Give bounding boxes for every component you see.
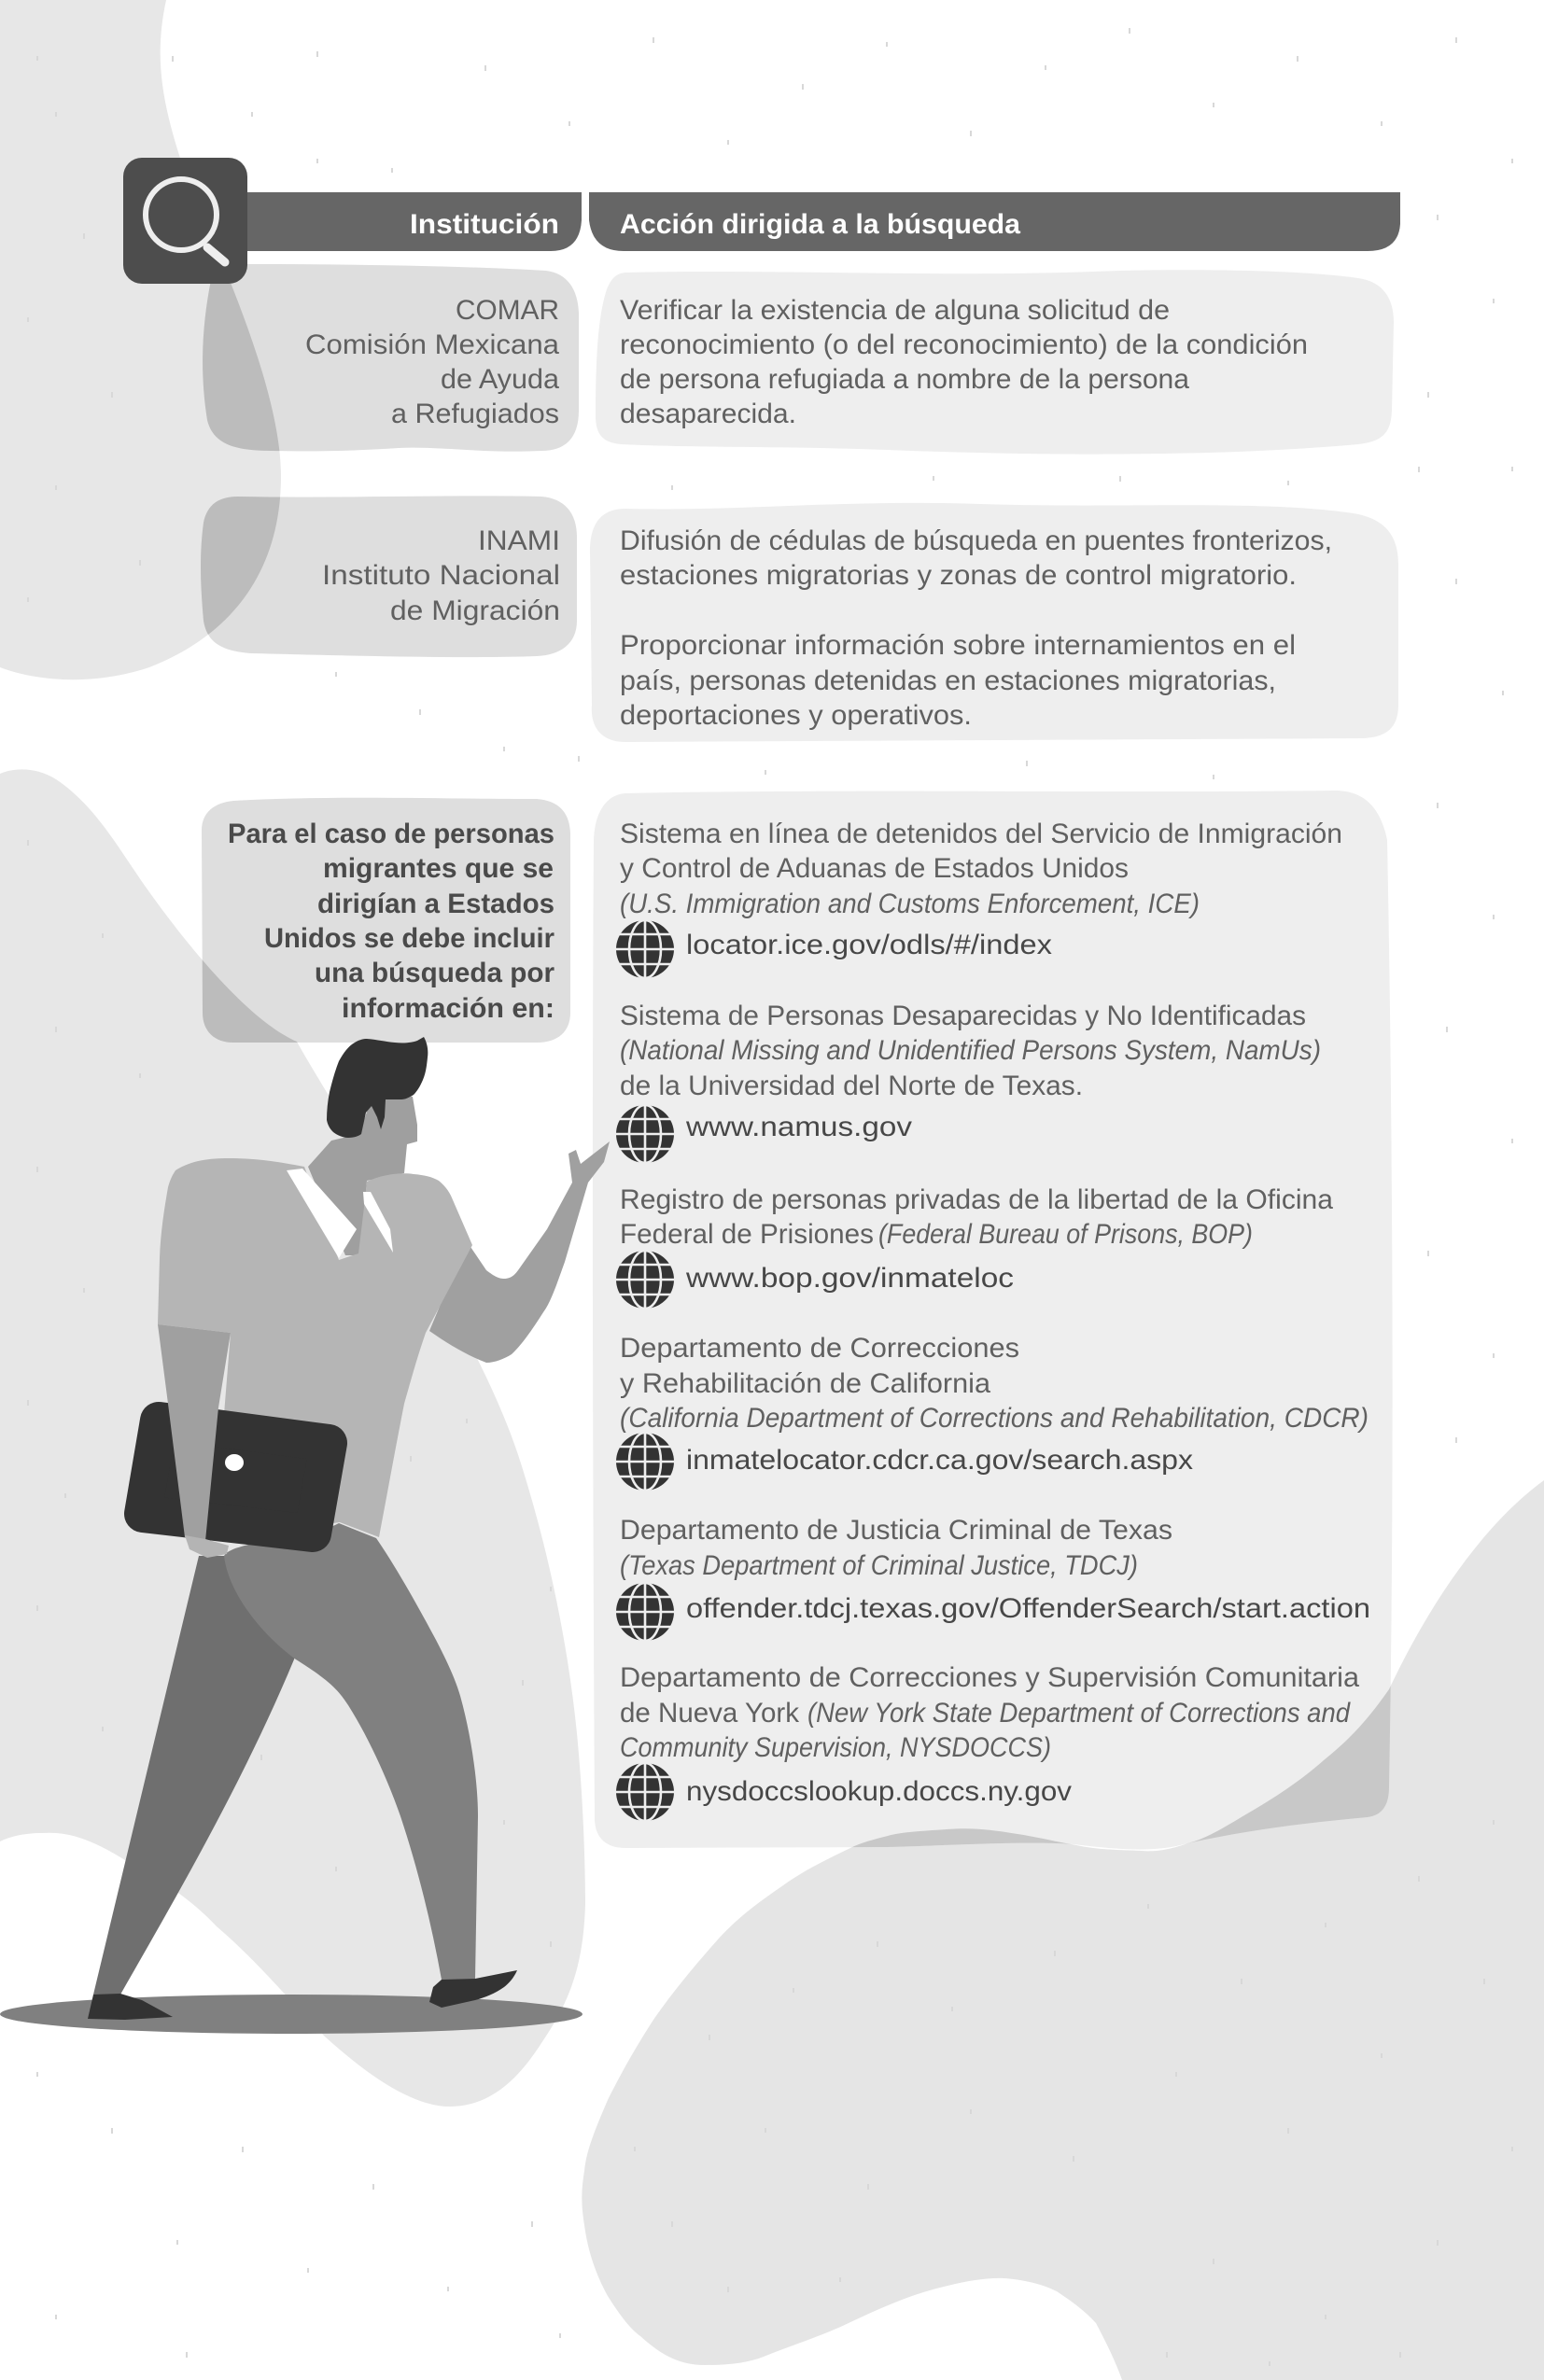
text: INAMI action: Difusión de cédulas de búsqueda en puentes fronterizos,	[620, 525, 1332, 556]
text: INAMI action: país, personas detenidas en estaciones migratorias,	[620, 665, 1276, 696]
text: COMAR action: desaparecida.	[620, 399, 796, 429]
header bar: Acción dirigida a la búsqueda: Acción dirigida a la búsqueda	[620, 209, 1020, 240]
panel: INAMI action	[590, 503, 1398, 742]
text: migrants to United States note: información en:	[342, 993, 554, 1024]
panel: migrants to United States	[202, 797, 570, 1043]
entry: Federal Bureau of Prisons: Registro de personas privadas de la libertad de la Oficina	[620, 1184, 1333, 1215]
entry: NamUs	[615, 1001, 1321, 1164]
text: COMAR institution: a Refugiados	[391, 399, 559, 429]
entry: California corrections: y Rehabilitación de California	[620, 1368, 990, 1399]
entry: New York corrections	[615, 1662, 1359, 1822]
entry: NamUs: de la Universidad del Norte de Texas.	[620, 1071, 1083, 1101]
text: INAMI institution: INAMI	[478, 525, 560, 556]
text: COMAR action	[620, 295, 1308, 429]
text: migrants to United States note: dirigían a Estados	[317, 889, 554, 919]
entry: Texas criminal justice: offender.tdcj.texas.gov/OffenderSearch/start.action	[686, 1593, 1370, 1624]
folder clasp	[225, 1454, 244, 1471]
raised arm	[429, 1141, 610, 1363]
icon: globe	[615, 1104, 675, 1164]
ground shadow	[0, 1995, 583, 2034]
entry: Texas criminal justice: (Texas Department of Criminal Justice, TDCJ)	[620, 1550, 1138, 1581]
text: INAMI institution: de Migración	[390, 595, 560, 626]
entry: California corrections: (California Department of Corrections and Rehabilitation, CDCR)	[620, 1403, 1369, 1434]
entry: Federal Bureau of Prisons	[615, 1184, 1333, 1309]
rear leg	[93, 1556, 317, 1995]
hair	[327, 1037, 428, 1138]
entry: New York corrections: de Nueva York	[620, 1698, 800, 1729]
header bar: Institución	[247, 192, 582, 251]
entry: ICE locator: (U.S. Immigration and Customs Enforcement, ICE)	[620, 889, 1200, 919]
background blob: middle left	[0, 769, 585, 2107]
icon: globe	[615, 1250, 675, 1309]
shirt	[158, 1158, 472, 1537]
text: INAMI institution	[322, 525, 560, 626]
entry: Federal Bureau of Prisons: (Federal Bureau of Prisons, BOP)	[878, 1219, 1253, 1250]
icon: globe	[615, 1762, 675, 1822]
collar	[287, 1169, 393, 1258]
entry: ICE locator: Sistema en línea de detenidos del Servicio de Inmigración	[620, 819, 1342, 849]
icon: globe	[615, 1432, 675, 1491]
header bar: Acción dirigida a la búsqueda	[589, 192, 1400, 251]
text: COMAR institution	[305, 295, 559, 429]
text: COMAR action: reconocimiento (o del reconocimiento) de la condición	[620, 329, 1308, 360]
entry: NamUs: www.namus.gov	[685, 1112, 912, 1142]
hand	[185, 1535, 229, 1558]
entry: NamUs: Sistema de Personas Desaparecidas y No Identificadas	[620, 1001, 1306, 1031]
panel: COMAR action	[596, 270, 1394, 455]
entry: New York corrections: nysdoccslookup.doccs.ny.gov	[686, 1776, 1072, 1807]
illustration: walking man with folder	[0, 1037, 610, 2034]
background blob: bottom right	[582, 1480, 1544, 2380]
entry: California corrections	[615, 1333, 1369, 1491]
icon: globe	[615, 1582, 675, 1642]
front shoe	[429, 1970, 517, 2008]
text: COMAR action: Verificar la existencia de alguna solicitud de	[620, 295, 1170, 326]
entry: Texas criminal justice	[615, 1515, 1370, 1642]
entry: ICE locator	[615, 819, 1342, 979]
text: migrants to United States note: Unidos se debe incluir	[264, 923, 554, 954]
entry: New York corrections: Community Supervision, NYSDOCCS)	[620, 1732, 1051, 1763]
neck and face	[308, 1092, 417, 1255]
text: migrants to United States note	[228, 819, 554, 1024]
rear shoe	[88, 1994, 173, 2020]
text: COMAR action: de persona refugiada a nombre de la persona	[620, 364, 1189, 395]
header bar: Institución: Institución	[410, 209, 559, 240]
entry: ICE locator: locator.ice.gov/odls/#/index	[686, 930, 1052, 960]
entry: New York corrections: (New York State Department of Corrections and	[807, 1698, 1351, 1729]
text: INAMI action	[620, 525, 1332, 731]
text: INAMI action: estaciones migratorias y zonas de control migratorio.	[620, 560, 1297, 591]
entry: California corrections: Departamento de Correcciones	[620, 1333, 1019, 1364]
text: INAMI action: Proporcionar información sobre internamientos en el	[620, 630, 1296, 661]
lowered arm	[158, 1324, 231, 1541]
background blob: top left	[0, 0, 281, 679]
panel: COMAR institution	[203, 264, 579, 452]
text: COMAR institution: de Ayuda	[441, 364, 559, 395]
entry: NamUs: (National Missing and Unidentified Persons System, NamUs)	[620, 1035, 1321, 1066]
text: INAMI institution: Instituto Nacional	[322, 560, 560, 591]
front leg	[224, 1523, 478, 1980]
icon: globe	[615, 919, 675, 979]
panel: United States search systems	[593, 791, 1393, 1850]
entry: New York corrections: Departamento de Correcciones y Supervisión Comunitaria	[620, 1662, 1359, 1693]
text: COMAR institution: Comisión Mexicana	[305, 329, 559, 360]
entry: ICE locator: y Control de Aduanas de Estados Unidos	[620, 853, 1129, 884]
text: migrants to United States note: Para el caso de personas	[228, 819, 554, 849]
entry: Federal Bureau of Prisons: www.bop.gov/inmateloc	[685, 1263, 1014, 1294]
text: COMAR institution: COMAR	[456, 295, 559, 326]
panel: INAMI institution	[201, 497, 577, 657]
icon: magnifying glass	[123, 158, 247, 284]
entry: Federal Bureau of Prisons: Federal de Prisiones	[620, 1219, 874, 1250]
text: migrants to United States note: una búsqueda por	[315, 958, 554, 988]
entry: Texas criminal justice: Departamento de Justicia Criminal de Texas	[620, 1515, 1172, 1546]
text: INAMI action: deportaciones y operativos.	[620, 700, 972, 731]
folder	[143, 1421, 329, 1533]
text: migrants to United States note: migrantes que se	[323, 853, 554, 884]
entry: California corrections: inmatelocator.cdcr.ca.gov/search.aspx	[686, 1445, 1193, 1476]
